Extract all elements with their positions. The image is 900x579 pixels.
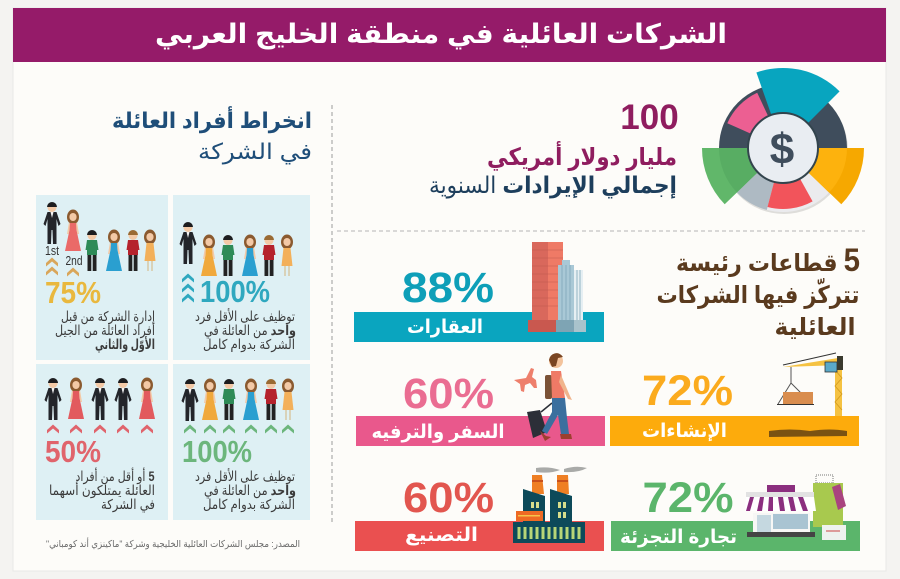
panel: 100% full-time employment bottom: الشركة بدوام كامل bbox=[203, 497, 295, 513]
panel: 100% full-time employment top: الشركة بدوام كامل bbox=[203, 337, 295, 353]
dashed horizontal divider bbox=[337, 230, 865, 232]
heading: family involvement: انخراط أفراد العائلة bbox=[112, 105, 312, 134]
panel: 100% full-time employment top: 100% bbox=[200, 274, 270, 309]
title bar: الشركات العائلية في منطقة الخليج العربي bbox=[155, 19, 727, 50]
panel: 75% management: أفراد العائلة من الجيل bbox=[55, 321, 155, 339]
panel: 100% full-time employment top bbox=[173, 195, 310, 360]
icon: airplane bbox=[514, 368, 537, 392]
icon: crane bbox=[769, 353, 847, 437]
people: five shareholders bbox=[44, 378, 155, 420]
sector: travel and leisure 60%: 60% bbox=[403, 370, 494, 418]
panel: 100% full-time employment bottom: 100% bbox=[182, 434, 252, 469]
sector: retail 72%: 72% bbox=[642, 474, 734, 522]
people: family members bbox=[180, 222, 293, 276]
panel: 75% management: 75% bbox=[45, 275, 101, 310]
headline figure: 100 billion dollars: إجمالي الإيرادات السنوية bbox=[429, 172, 677, 199]
panel: 75% management bbox=[36, 195, 168, 360]
panel: 50% shareholders bbox=[36, 364, 168, 520]
panel: 100% full-time employment bottom: واحد من العائلة في bbox=[204, 483, 296, 499]
panel: 50% shareholders: 5 أو أقل من أفراد bbox=[76, 467, 155, 485]
headline figure: 100 billion dollars: 100 bbox=[620, 98, 679, 137]
sector: construction 72%: 72% bbox=[642, 367, 733, 415]
people: family generations bbox=[44, 202, 156, 271]
sector: travel and leisure 60% bbox=[356, 353, 605, 446]
sector: retail 72%: تجارة التجزئة bbox=[620, 527, 737, 548]
panel: 50% shareholders: في الشركة bbox=[101, 497, 155, 513]
donut chart icon bbox=[702, 68, 864, 214]
panel: 100% full-time employment bottom bbox=[173, 364, 310, 520]
dashed vertical divider bbox=[331, 105, 333, 525]
panel: 100% full-time employment bottom: توظيف على الأقل فرد bbox=[195, 468, 295, 485]
heading: family involvement bbox=[112, 105, 312, 165]
headline figure: 100 billion dollars: مليار دولار أمريكي bbox=[487, 141, 677, 171]
sector: construction 72%: الإنشاءات bbox=[642, 421, 727, 442]
sector: travel and leisure 60%: السفر والترفيه bbox=[372, 422, 504, 443]
heading: family involvement: في الشركة bbox=[198, 139, 312, 165]
panel: 75% management: 1st bbox=[45, 243, 59, 258]
icon: traveller with suitcase bbox=[527, 353, 572, 441]
panel: 50% shareholders: 50% bbox=[45, 434, 101, 469]
donut chart icon: $ bbox=[770, 125, 794, 174]
panel: 100% full-time employment top: واحد من العائلة في bbox=[204, 323, 296, 339]
panel: 100% full-time employment top: توظيف على الأقل فرد bbox=[195, 308, 295, 325]
sector: retail 72% bbox=[611, 474, 860, 551]
sector: construction 72% bbox=[610, 353, 859, 446]
panel: 50% shareholders: العائلة يمتلكون أسهما bbox=[49, 481, 155, 499]
panel: 75% management: الأوّل والثاني bbox=[95, 336, 155, 352]
heading: five main sectors: 5 قطاعات رئيسة bbox=[676, 242, 860, 278]
sector: manufacturing 60%: 60% bbox=[403, 474, 494, 522]
sector: manufacturing 60%: التصنيع bbox=[405, 525, 478, 546]
heading: five main sectors bbox=[656, 242, 860, 341]
sector: real estate 88%: العقارات bbox=[407, 317, 483, 338]
headline figure: 100 billion dollars bbox=[429, 98, 679, 199]
sector: real estate 88%: 88% bbox=[402, 264, 494, 312]
icon: shop with bag and tag bbox=[745, 475, 846, 540]
icon: factory bbox=[513, 467, 587, 543]
sector: real estate 88% bbox=[354, 242, 604, 342]
heading: five main sectors: تتركّز فيها الشركات bbox=[656, 278, 860, 309]
sector: manufacturing 60% bbox=[355, 467, 604, 551]
heading: five main sectors: العائلية bbox=[774, 314, 856, 341]
title bar bbox=[13, 8, 886, 62]
icon: towers bbox=[528, 242, 586, 332]
panel: 75% management: إدارة الشركة من قبل bbox=[61, 309, 155, 325]
panel: 75% management: 2nd bbox=[66, 253, 82, 268]
source note: المصدر: مجلس الشركات العائلية الخليجية وشركة "ماكينزي أند كومباني" bbox=[46, 537, 300, 550]
people: family members bbox=[182, 378, 294, 421]
